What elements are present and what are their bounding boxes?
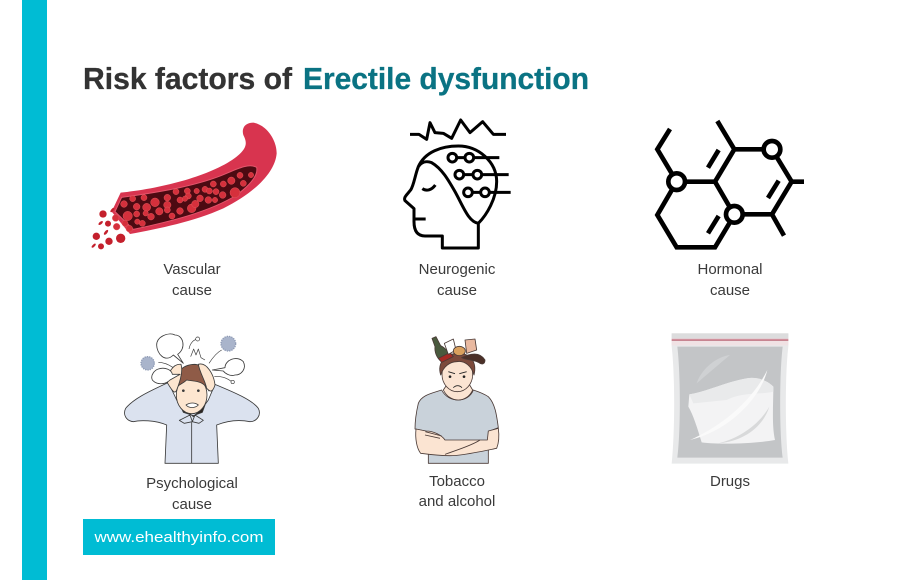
website badge: www.ehealthyinfo.com [93, 529, 263, 546]
title [83, 61, 589, 96]
label: psychological cause: cause [172, 496, 212, 513]
label: hormonal cause: Hormonal [697, 261, 763, 278]
icon: hormone molecule [657, 121, 804, 247]
icon: plastic bag of powder [672, 333, 788, 464]
panel: hormonal cause [657, 121, 804, 299]
panel: vascular cause [91, 123, 277, 299]
label: tobacco and alcohol: Tobacco [429, 473, 485, 490]
title: Risk factors of [83, 61, 293, 96]
icon: man with bottles [415, 337, 499, 463]
label: neurogenic cause: cause [437, 282, 477, 299]
side bar [22, 0, 47, 580]
icon: head with circuits [405, 120, 511, 248]
panel: neurogenic cause [405, 120, 511, 299]
title: Erectile dysfunction [303, 61, 589, 96]
label: neurogenic cause: Neurogenic [419, 261, 496, 278]
website badge [83, 519, 275, 555]
panel: tobacco and alcohol [415, 337, 499, 510]
panel: psychological cause [125, 334, 259, 513]
label: drugs: Drugs [710, 473, 750, 490]
icon: blood vessel [91, 123, 277, 249]
icon: stressed man [125, 334, 259, 463]
label: vascular cause: cause [172, 282, 212, 299]
label: hormonal cause: cause [710, 282, 750, 299]
label: psychological cause: Psychological [146, 475, 238, 492]
label: vascular cause: Vascular [163, 261, 221, 278]
panel: drugs [672, 333, 788, 490]
label: tobacco and alcohol: and alcohol [419, 493, 495, 510]
